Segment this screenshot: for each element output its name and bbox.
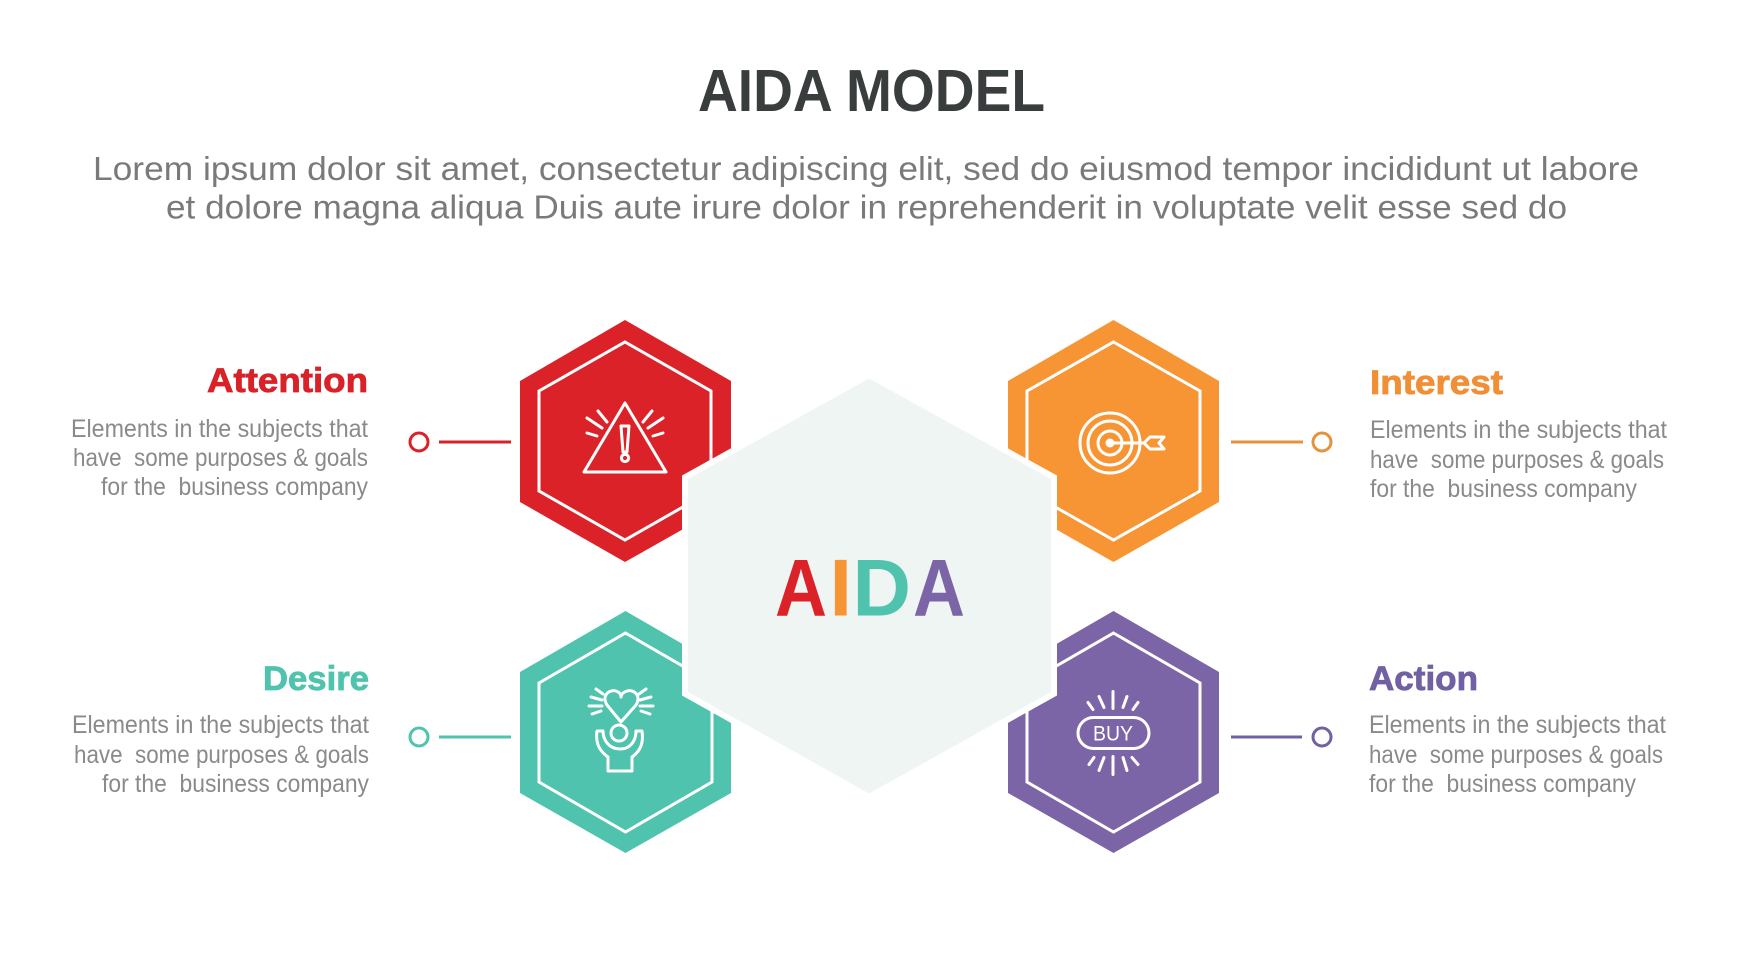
heading: attention: Attention xyxy=(207,362,368,400)
description: attention xyxy=(71,415,368,501)
subtitle text block: Lorem ipsum dolor sit amet, consectetur adipiscing elit, sed do eiusmod tempor incididunt ut labore xyxy=(93,151,1639,188)
heading: action: Action xyxy=(1369,660,1478,698)
center label: AIDA: A xyxy=(775,544,827,634)
panel: attention text xyxy=(71,362,368,501)
icon: warning triangle xyxy=(584,403,666,472)
title: AIDA MODEL xyxy=(698,58,1045,124)
description: attention: Elements in the subjects that xyxy=(71,415,368,443)
description: action xyxy=(1369,711,1666,798)
connector: action xyxy=(1231,728,1331,746)
center hexagon xyxy=(688,378,1051,794)
description: interest: for the business company xyxy=(1370,475,1637,503)
description: desire: have some purposes & goals xyxy=(74,741,369,769)
description: action: have some purposes & goals xyxy=(1369,741,1663,769)
center label: AIDA: I xyxy=(830,544,852,634)
icon: hands holding heart xyxy=(589,689,653,771)
icon: buy button with rays xyxy=(1078,692,1149,774)
description: action: for the business company xyxy=(1369,770,1636,798)
connector: attention xyxy=(410,433,511,451)
description: interest xyxy=(1370,416,1667,503)
heading: desire: Desire xyxy=(263,660,369,698)
description: desire xyxy=(72,711,369,798)
description: desire: Elements in the subjects that xyxy=(72,711,369,739)
connector: desire xyxy=(410,728,511,746)
panel: action text xyxy=(1369,660,1666,798)
hexagon: attention xyxy=(520,320,731,562)
center label: AIDA xyxy=(775,544,965,634)
hexagon: action xyxy=(1008,611,1219,853)
description: attention: have some purposes & goals xyxy=(73,444,368,472)
panel: desire text xyxy=(72,660,369,798)
heading: interest: Interest xyxy=(1370,364,1503,402)
description: interest: have some purposes & goals xyxy=(1370,446,1664,474)
subtitle text block: et dolore magna aliqua Duis aute irure dolor in reprehenderit in voluptate velit esse sed do xyxy=(166,190,1567,226)
icon: buy button with rays: BUY xyxy=(1093,722,1133,746)
subtitle text block xyxy=(93,151,1639,226)
description: action: Elements in the subjects that xyxy=(1369,711,1666,739)
center label: AIDA: D xyxy=(852,544,911,634)
connector: interest xyxy=(1231,433,1331,451)
center label: AIDA: A xyxy=(913,544,965,634)
hexagon: interest xyxy=(1008,320,1219,562)
description: desire: for the business company xyxy=(102,770,369,798)
panel: interest text xyxy=(1370,364,1667,503)
description: attention: for the business company xyxy=(101,473,368,501)
icon: target with arrow xyxy=(1080,413,1164,473)
hexagon: desire xyxy=(520,611,731,853)
description: interest: Elements in the subjects that xyxy=(1370,416,1667,444)
